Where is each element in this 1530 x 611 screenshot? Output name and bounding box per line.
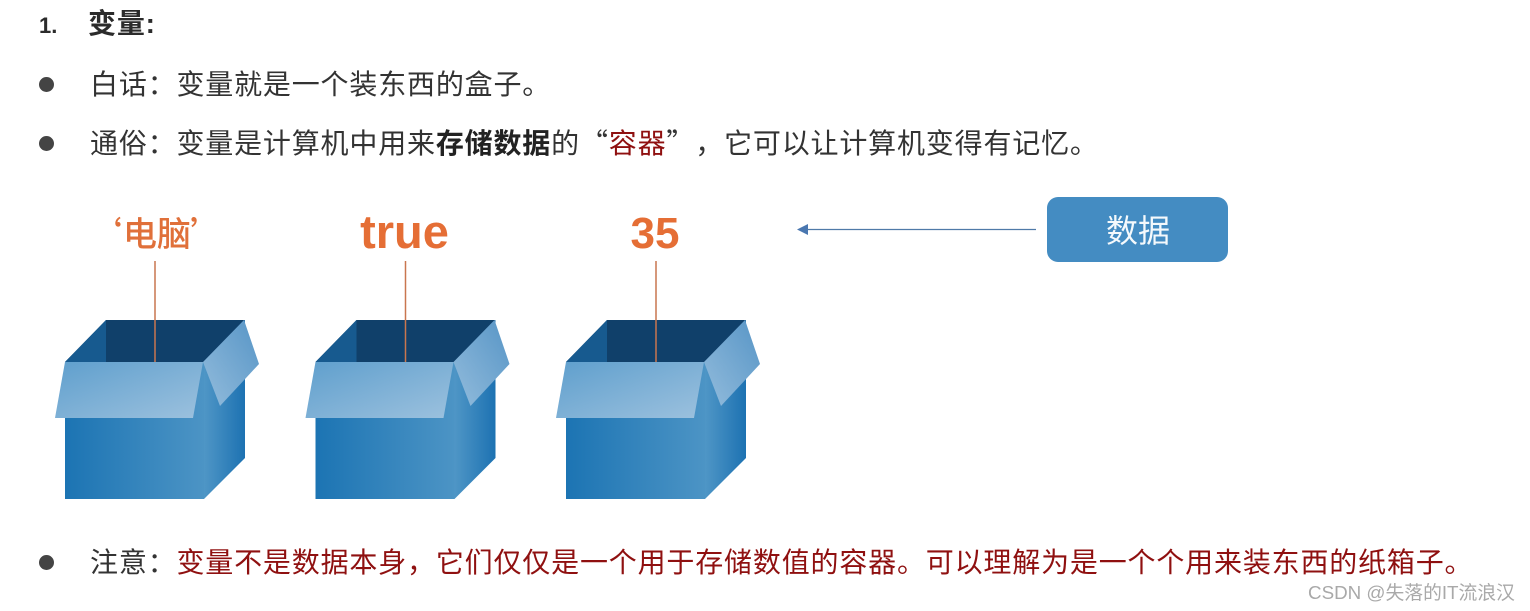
bullet line: note in red: 注意：变量不是数据本身，它们仅仅是一个用于存储数值的容器。可以理解为是一个个用来装东西的纸箱子。 <box>90 547 1473 578</box>
heading: 1. variables <box>39 8 156 39</box>
data label button <box>1047 197 1228 262</box>
box 1 with label <box>55 207 259 499</box>
heading: 1. variables: 1. <box>39 13 57 38</box>
arrow pointing to boxes <box>797 224 1036 235</box>
box 2 with label: true <box>360 205 449 258</box>
box 3 with label <box>556 209 760 499</box>
bullet line: plain-language definition: 白话：变量就是一个装东西的盒子。 <box>90 69 551 100</box>
watermark: CSDN @失落的IT流浪汉 <box>1308 582 1515 603</box>
box 2 with label <box>306 205 510 499</box>
box 1 with label: ‘电脑’ <box>88 207 224 256</box>
data label button: 数据 <box>1106 213 1170 249</box>
box 3 with label: 35 <box>631 209 679 258</box>
bullet line: common definition: 通俗：变量是计算机中用来存储数据的“容器”，它可以让计算机变得有记忆。 <box>90 122 1099 162</box>
heading: 1. variables: 变量: <box>88 8 156 39</box>
